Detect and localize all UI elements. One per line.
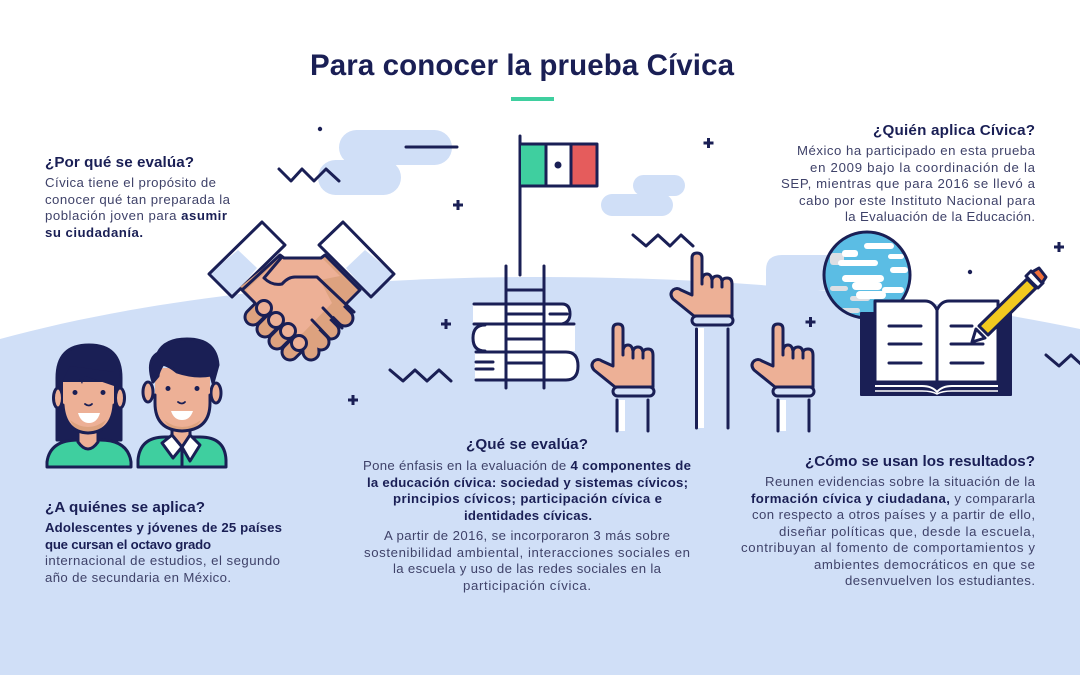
body: principios cívicos; participación cívica e (393, 491, 662, 506)
icon: raised hand left (592, 324, 654, 431)
body: Adolescentes y jóvenes de 25 países (45, 520, 282, 535)
body: Cívica tiene el propósito de (45, 175, 216, 190)
body: Reunen evidencias sobre la situación de la (765, 474, 1036, 489)
body: en 2009 bajo la coordinación de la (810, 160, 1036, 175)
body: SEP, mientras que para 2016 se llevó a (781, 176, 1036, 191)
clouds and line top centre (318, 130, 457, 195)
body: México ha participado en esta prueba (797, 143, 1036, 158)
body: contribuyan al fomento de comportamientos y (741, 540, 1035, 555)
body: diseñar políticas que, desde la escuela, (779, 524, 1035, 539)
icon: open book (860, 301, 1012, 396)
lower fingers left (253, 300, 306, 352)
icon: globe (824, 232, 910, 318)
body: identidades cívicas. (464, 508, 592, 523)
knuckle circles (256, 300, 306, 350)
body: conocer qué tan preparada la (45, 192, 231, 207)
heading: ¿A quiénes se aplica? (45, 499, 205, 516)
body: participación cívica. (463, 578, 591, 593)
light blue hill background (0, 277, 1080, 675)
girl (47, 345, 131, 467)
body: la educación cívica: sociedad y sistemas cívicos; (367, 475, 688, 490)
body: Pone énfasis en la evaluación de 4 componentes de (363, 458, 691, 473)
text block: quién aplica (781, 122, 1036, 224)
body (45, 520, 282, 585)
heading: ¿Qué se evalúa? (466, 436, 588, 453)
clouds near flag (601, 175, 685, 216)
body: población joven para asumir (45, 208, 227, 223)
body: la escuela y uso de las redes sociales en la (393, 561, 662, 576)
icon: raised hand centre (671, 253, 733, 428)
body: sostenibilidad ambiental, interacciones sociales en (364, 545, 690, 560)
heading: ¿Cómo se usan los resultados? (805, 453, 1035, 470)
body: formación cívica y ciudadana, y compararla (751, 491, 1036, 506)
decorative plus marks and dots (318, 127, 1064, 405)
icon: two students (47, 339, 226, 467)
body: la Evaluación de la Educación. (845, 209, 1035, 224)
text block: cómo se usan los resultados (741, 453, 1036, 588)
body: desenvuelven los estudiantes. (845, 573, 1035, 588)
icon: handshake (209, 222, 394, 352)
body: cabo por este Instituto Nacional para (799, 193, 1036, 208)
body: su ciudadanía. (45, 225, 143, 240)
palm (242, 254, 360, 348)
title: Para conocer la prueba Cívica (310, 49, 735, 82)
lower fingers right (305, 300, 345, 352)
icon: Mexican flag (520, 136, 597, 275)
heading: ¿Por qué se evalúa? (45, 154, 194, 171)
body: ambientes democráticos en que se (814, 557, 1035, 572)
icon: pencil (972, 268, 1046, 342)
heading: ¿Quién aplica Cívica? (873, 122, 1035, 139)
text block: a quiénes se aplica (45, 499, 282, 585)
body: que cursan el octavo grado (45, 537, 211, 552)
body (781, 143, 1036, 224)
body: A partir de 2016, se incorporaron 3 más sobre (384, 528, 670, 543)
body: internacional de estudios, el segundo (45, 553, 280, 568)
boy (138, 339, 226, 467)
decorative zigzags (279, 169, 1080, 381)
cloud: right behind globe (766, 255, 840, 290)
palm outline (242, 255, 360, 339)
icon: stacked books and ladder (473, 266, 578, 388)
icon: raised hand right (752, 324, 814, 431)
text block: por qué se evalúa (45, 154, 231, 240)
body (45, 175, 231, 240)
body: año de secundaria en México. (45, 570, 231, 585)
title accent bar (511, 97, 554, 101)
text block: qué se evalúa (363, 436, 691, 593)
right cuff (319, 222, 394, 297)
body (363, 458, 691, 593)
left cuff (209, 222, 285, 297)
body: con respecto a otros países y a partir de ello, (752, 507, 1035, 522)
body (741, 474, 1036, 588)
